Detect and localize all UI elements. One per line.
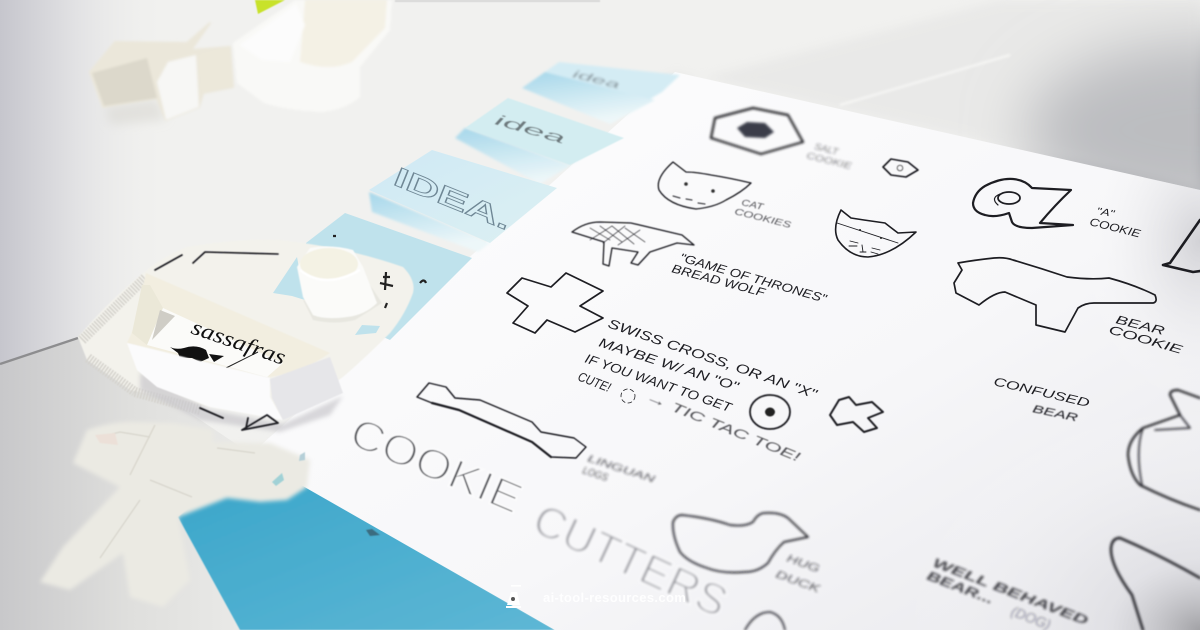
sketch: cat face with stripe bbox=[836, 210, 916, 257]
label: game of thrones: BREAD WOLF bbox=[670, 261, 767, 300]
label: duck: DUCK bbox=[774, 569, 822, 596]
notes: swiss cross text: MAYBE W/ AN "O" bbox=[597, 335, 742, 395]
label: a cookie bbox=[1088, 206, 1142, 241]
note 3: IDEA bbox=[369, 150, 557, 252]
heading: cookie cutters bbox=[343, 408, 735, 627]
sketch: swiss cross bbox=[507, 273, 603, 333]
yellow-green object bbox=[255, 0, 285, 14]
sketch: partial letter at edge bbox=[1163, 220, 1200, 272]
boat floor bbox=[147, 308, 283, 377]
heading: cookie cutters: CUTTERS bbox=[526, 495, 735, 627]
label: well behaved bear bbox=[925, 555, 1091, 630]
label: duck bbox=[774, 553, 822, 596]
label: bear cookie: COOKIE bbox=[1107, 322, 1186, 357]
label: rolling pin note bbox=[581, 453, 657, 486]
watermark icon bbox=[506, 585, 521, 608]
note 2: idea bbox=[493, 112, 567, 148]
label: duck: HUG bbox=[785, 553, 822, 576]
label: cat cookies: COOKIES bbox=[734, 206, 792, 230]
sketch: small hexagon bbox=[883, 159, 918, 177]
boat interior walls bbox=[127, 273, 330, 377]
sketch: letter a cookie bbox=[973, 179, 1073, 228]
label: salt cookie: SALT bbox=[814, 141, 841, 157]
notes: swiss cross text: SWISS CROSS, OR AN "X" bbox=[606, 316, 821, 402]
mesh footprint of cutter bbox=[78, 236, 426, 420]
white sketch paper bbox=[250, 72, 1200, 630]
sketch: large hexagon bbox=[711, 108, 803, 154]
sketch: right bear shape bbox=[1111, 538, 1200, 630]
label: cat cookies: CAT bbox=[741, 197, 766, 212]
sketch: rolling pin bbox=[417, 383, 586, 458]
dark table seam bbox=[0, 338, 78, 364]
sketch: partial shape at bottom bbox=[745, 612, 785, 630]
note 1 bbox=[522, 62, 680, 124]
notes: swiss cross text: CUTE! bbox=[576, 369, 613, 395]
note 3: IDEA: IDEA. bbox=[390, 162, 516, 236]
cookie cutter: boat with sassafras print bbox=[127, 273, 343, 432]
watermark text: ai-tool-resources.com bbox=[543, 590, 686, 605]
boat end wall bbox=[270, 357, 343, 420]
printed triangles under boat bbox=[200, 408, 278, 430]
notes: swiss cross text bbox=[576, 316, 821, 465]
note patch seen through cutter bbox=[273, 257, 305, 300]
notes: swiss cross text: IF YOU WANT TO GET bbox=[583, 351, 735, 415]
note 4 bbox=[300, 213, 472, 340]
watermark bbox=[506, 585, 686, 608]
paper shading at right edge bbox=[1000, 145, 1200, 420]
label: confused bear: CONFUSED bbox=[992, 374, 1091, 410]
label: salt cookie: COOKIE bbox=[806, 150, 854, 171]
paper sheet under: blue folder bbox=[178, 480, 555, 630]
cookie cutter: star bbox=[90, 23, 233, 125]
printed marks seen through cutter bbox=[333, 236, 426, 308]
label: rolling pin note: LINGUAN bbox=[586, 453, 657, 486]
printed word: sassafras bbox=[188, 314, 289, 370]
sketch: target circle bbox=[750, 395, 790, 429]
label: well behaved bear: WELL BEHAVED bbox=[931, 555, 1091, 628]
cookie cutter: flat flower bbox=[40, 422, 310, 607]
heading: cookie cutters: COOKIE bbox=[343, 408, 529, 522]
label: rolling pin note: LOGS bbox=[581, 465, 609, 484]
label: a cookie: "A" bbox=[1095, 206, 1116, 220]
notes: swiss cross text: → TIC TAC TOE! bbox=[644, 389, 803, 465]
sketch: game of thrones wolf bbox=[572, 222, 694, 266]
paper corner shading bbox=[900, 400, 1200, 630]
label: well behaved bear: BEAR... bbox=[925, 568, 996, 607]
label: cat cookies bbox=[734, 197, 792, 230]
sketch: right bird shape bbox=[1128, 390, 1200, 510]
cookie cutter: small cup bbox=[297, 246, 382, 322]
flower details bbox=[95, 425, 305, 558]
label: confused bear bbox=[992, 374, 1091, 425]
note 1: idea bbox=[571, 68, 621, 92]
fold mark on blue bbox=[366, 529, 380, 536]
boat shadow bbox=[140, 372, 343, 432]
label: bear cookie bbox=[1107, 312, 1186, 357]
label: a cookie: COOKIE bbox=[1088, 216, 1142, 241]
sticky notes strip bbox=[300, 62, 680, 340]
label: game of thrones bbox=[670, 250, 829, 306]
label: confused bear: BEAR bbox=[1031, 403, 1079, 425]
sketch: cat cookie bbox=[658, 162, 751, 209]
note 2 bbox=[455, 98, 624, 184]
label: bear cookie: BEAR bbox=[1114, 312, 1167, 338]
sketch: small x cross bbox=[830, 397, 883, 432]
label: game of thrones: "GAME OF THRONES" bbox=[678, 250, 829, 306]
cookie cutter: boat at top bbox=[233, 0, 392, 112]
sketch: bear cookie bbox=[954, 258, 1156, 332]
printed animal bbox=[170, 346, 224, 362]
sketch: duck bbox=[673, 513, 808, 572]
label: salt cookie bbox=[806, 141, 854, 171]
boat front wall bbox=[127, 343, 283, 420]
